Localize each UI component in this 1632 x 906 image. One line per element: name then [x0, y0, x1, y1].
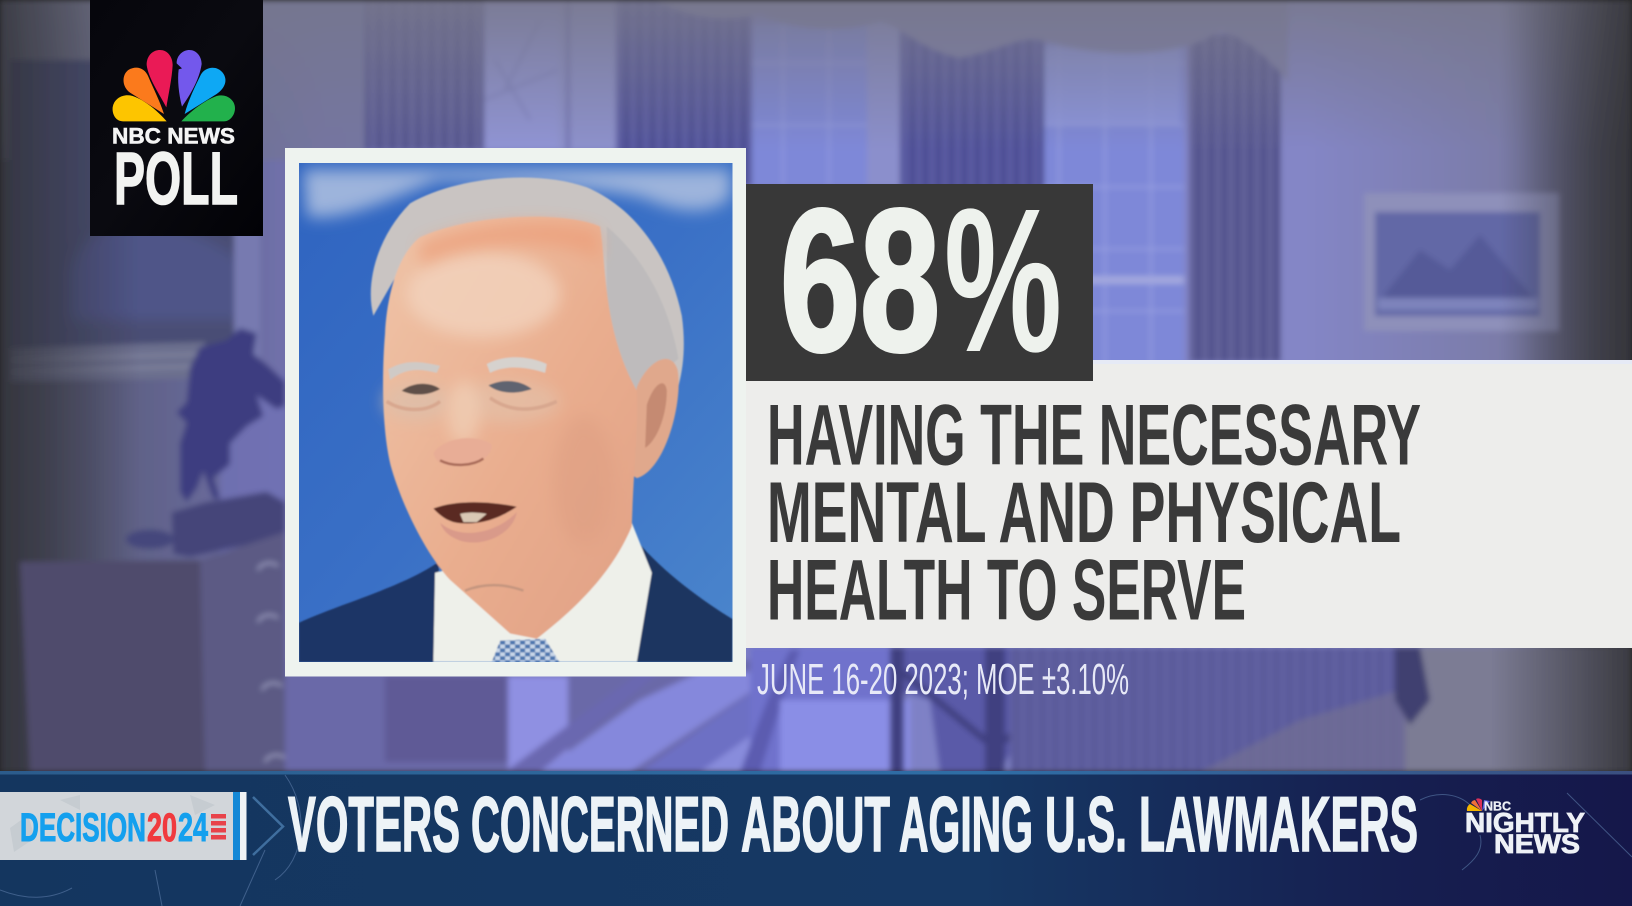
- NBC Nightly News logo: NIGHTLY: [1465, 807, 1585, 838]
- NBC Nightly News logo: NEWS: [1494, 829, 1580, 859]
- 68% figure: %: [944, 166, 1062, 395]
- lower room: stool, rug, chair: [285, 647, 1632, 772]
- center window: [752, 20, 900, 186]
- face: [383, 217, 637, 639]
- mouth: [433, 502, 517, 523]
- icon: flag stripes: [211, 814, 226, 840]
- bronze statue: [126, 328, 285, 557]
- percentage block: [746, 166, 1093, 395]
- right center curtain: [900, 20, 1044, 190]
- 68% figure: 68: [780, 167, 940, 393]
- NBC Nightly News logo: [1465, 798, 1585, 859]
- lower wall colour, right of statue: [220, 375, 285, 560]
- headline: ABOUT: [741, 780, 890, 868]
- shirt: [433, 523, 652, 662]
- POLL wordmark: POLL: [114, 137, 238, 220]
- photo: [299, 163, 732, 662]
- left curtain: [365, 0, 484, 150]
- NBC Nightly News logo: NBC: [1484, 798, 1512, 814]
- eyebrows: [388, 362, 440, 380]
- portrait photo with white frame: [285, 148, 746, 676]
- Decision 2024 tag: [0, 792, 246, 860]
- ear: [628, 359, 679, 478]
- lower third banner: [0, 771, 1632, 906]
- top left wall and painting: [0, 0, 365, 382]
- headline: AGING: [899, 780, 1033, 868]
- dresser: [20, 532, 285, 772]
- right curtain: [1189, 34, 1281, 362]
- white text panel: [746, 360, 1632, 648]
- headline: [288, 780, 1418, 868]
- NBC NEWS wordmark: NBC NEWS: [112, 124, 235, 148]
- hair: [371, 177, 684, 401]
- chevron arrow: [253, 797, 283, 855]
- icon: NBC peacock: [113, 50, 235, 121]
- center curtain: [616, 0, 752, 186]
- headline: VOTERS: [288, 780, 460, 868]
- headline: CONCERNED: [471, 780, 729, 868]
- Decision 2024 tag: 20: [147, 806, 177, 850]
- headline: U.S.: [1045, 780, 1127, 868]
- poll date and margin of error: JUNE 16-20 2023; MOE ±3.10%: [757, 656, 1129, 704]
- icon: small peacock: [1467, 798, 1490, 811]
- left window: [484, 0, 616, 150]
- nose: [433, 438, 492, 466]
- statement text: [767, 388, 1421, 638]
- statement text: HEALTH TO SERVE: [767, 542, 1246, 638]
- Decision 2024 tag: 24: [178, 806, 209, 850]
- eyes: [402, 384, 440, 395]
- tie: [492, 639, 559, 662]
- Decision 2024 tag: DECISION: [20, 806, 146, 850]
- valance: [655, 0, 1288, 82]
- right window: [1044, 44, 1184, 364]
- suit: [299, 562, 443, 662]
- NBC News Poll logo box: [90, 0, 263, 236]
- wall painting right: [1364, 193, 1559, 331]
